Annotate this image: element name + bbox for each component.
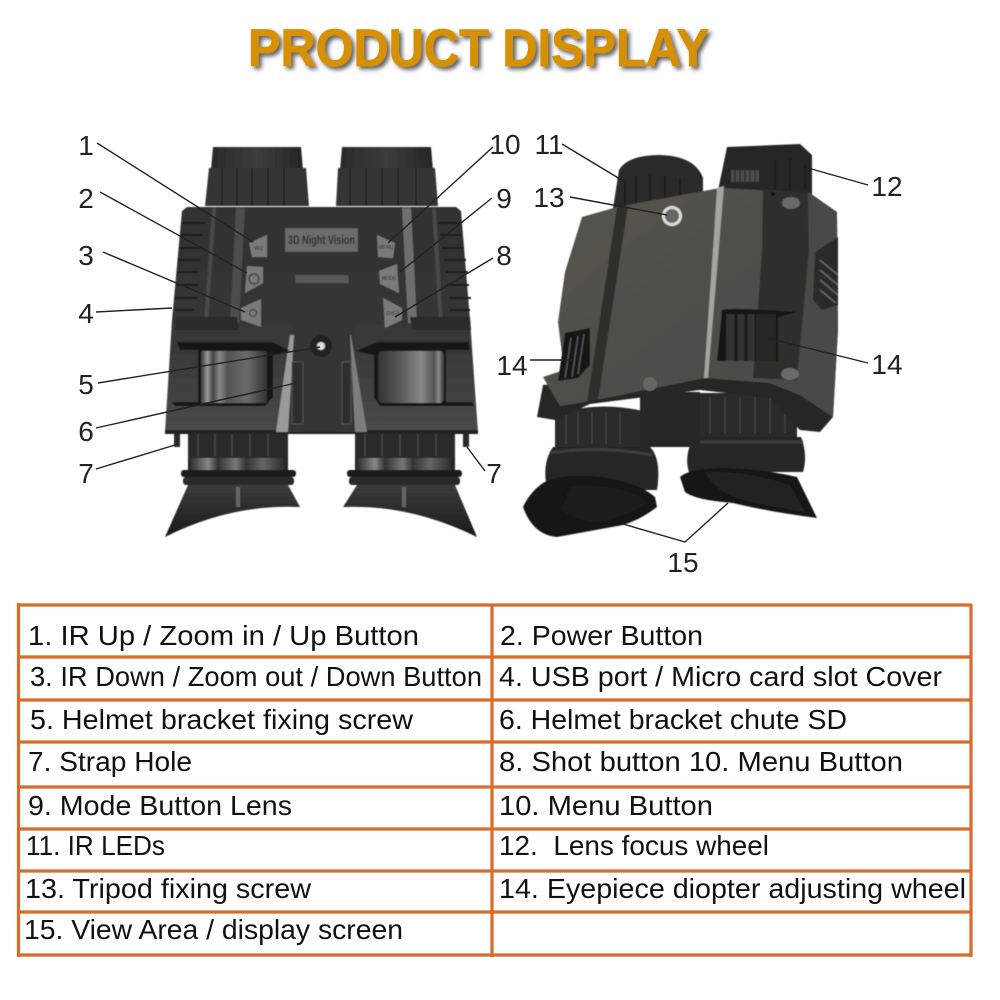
- callout numbers: 3: [78, 240, 94, 271]
- icon: button shot: SHOT: [386, 311, 400, 317]
- icon: button mode: MODE: [382, 276, 397, 282]
- icon: right eyecup: [680, 468, 817, 518]
- illustration: angled view of binoculars: [523, 144, 838, 537]
- icon: button zoom: [241, 299, 261, 327]
- right shoulder panel: [770, 193, 838, 417]
- icon: near objective block: [716, 144, 812, 200]
- callout numbers: [78, 129, 903, 578]
- callout numbers: 15: [667, 547, 699, 578]
- dots: [782, 197, 800, 209]
- icon: tripod screw: [662, 206, 682, 226]
- parts table: 9. Mode Button Lens: [28, 790, 292, 821]
- parts table: 11. IR LEDs: [26, 830, 165, 861]
- icon: button mode: [379, 264, 399, 293]
- callout numbers: 9: [496, 183, 512, 214]
- title: PRODUCT DISPLAY: [248, 19, 709, 78]
- callout numbers: 4: [78, 298, 94, 329]
- icon: right objective tube: [336, 147, 438, 206]
- parts table: 1. IR Up / Zoom in / Up Button: [28, 620, 419, 651]
- icon: far objective tube: [612, 155, 703, 215]
- icon: strap hooks: [174, 431, 469, 447]
- icon: lower right eyepiece: [343, 430, 477, 537]
- parts table: 2. Power Button: [500, 620, 703, 651]
- illustration: front view of binoculars: [165, 147, 478, 537]
- icon: left diopter wheel recess: [172, 342, 290, 406]
- icon: button IR up: [249, 235, 267, 257]
- callout numbers: 8: [496, 240, 512, 271]
- callout numbers: 7: [486, 458, 502, 489]
- light edge: [704, 186, 724, 378]
- side grips: [174, 223, 471, 310]
- panel: main body: [543, 188, 838, 417]
- parts table: [18, 603, 972, 957]
- icon: left eyecup: [523, 476, 657, 537]
- icon: left diopter wheel: [558, 328, 590, 381]
- callout numbers: 14: [496, 350, 528, 381]
- panel: lower dark band of body: [537, 370, 833, 432]
- callout numbers: 14: [871, 349, 903, 380]
- parts table: 14. Eyepiece diopter adjusting wheel: [499, 873, 966, 904]
- label: 3D Night Vision plate: 3D Night Vision: [288, 235, 355, 247]
- icon: right eyepiece collar: [687, 393, 805, 472]
- callout numbers: 7: [78, 458, 94, 489]
- icon: right diopter wheel recess: [356, 342, 474, 406]
- parts table: 6. Helmet bracket chute SD: [499, 704, 847, 735]
- dark side panel: [753, 189, 809, 380]
- icon: button shot: [383, 298, 402, 328]
- icon: button menu: MENU: [379, 245, 394, 251]
- parts table: 8. Shot button 10. Menu Button: [499, 746, 903, 777]
- parts table: 3. IR Down / Zoom out / Down Button: [30, 661, 482, 692]
- callout numbers: 2: [78, 183, 94, 214]
- icon: helmet screw: [310, 335, 332, 357]
- parts table: 7. Strap Hole: [28, 746, 192, 777]
- icon: right diopter wheel: [717, 309, 797, 361]
- callout numbers: 11: [534, 129, 564, 160]
- parts table: 12. Lens focus wheel: [499, 830, 769, 861]
- central raised panel: [285, 275, 362, 432]
- callout numbers: 5: [78, 369, 94, 400]
- panel: front body: [165, 207, 478, 432]
- icon: button IR up: IR/Z: [254, 246, 264, 252]
- icon: power button: [245, 266, 263, 293]
- side vent: [813, 237, 838, 310]
- leader lines: [96, 143, 868, 542]
- parts table: 4. USB port / Micro card slot Cover: [499, 661, 942, 692]
- parts table: 13. Tripod fixing screw: [25, 873, 312, 904]
- callout numbers: 6: [78, 416, 94, 447]
- parts table: 5. Helmet bracket fixing screw: [30, 704, 414, 735]
- callout numbers: 12: [871, 171, 903, 202]
- callout numbers: 10: [489, 129, 521, 160]
- dark stripe: [587, 206, 628, 402]
- parts table: 15. View Area / display screen: [24, 914, 403, 945]
- icon: left objective tube: [205, 147, 309, 206]
- callout numbers: 1: [78, 130, 94, 161]
- callout numbers: 13: [533, 182, 565, 213]
- icon: lower left eyepiece: [165, 430, 300, 537]
- dark block between eyepieces: [640, 392, 700, 447]
- label: 3D Night Vision plate: [285, 228, 358, 252]
- helmet bracket chutes: [292, 362, 303, 424]
- parts table: 10. Menu Button: [499, 790, 713, 821]
- grey accents: [230, 208, 245, 323]
- icon: button menu: [377, 235, 395, 258]
- icon: left eyepiece collar: [545, 406, 658, 490]
